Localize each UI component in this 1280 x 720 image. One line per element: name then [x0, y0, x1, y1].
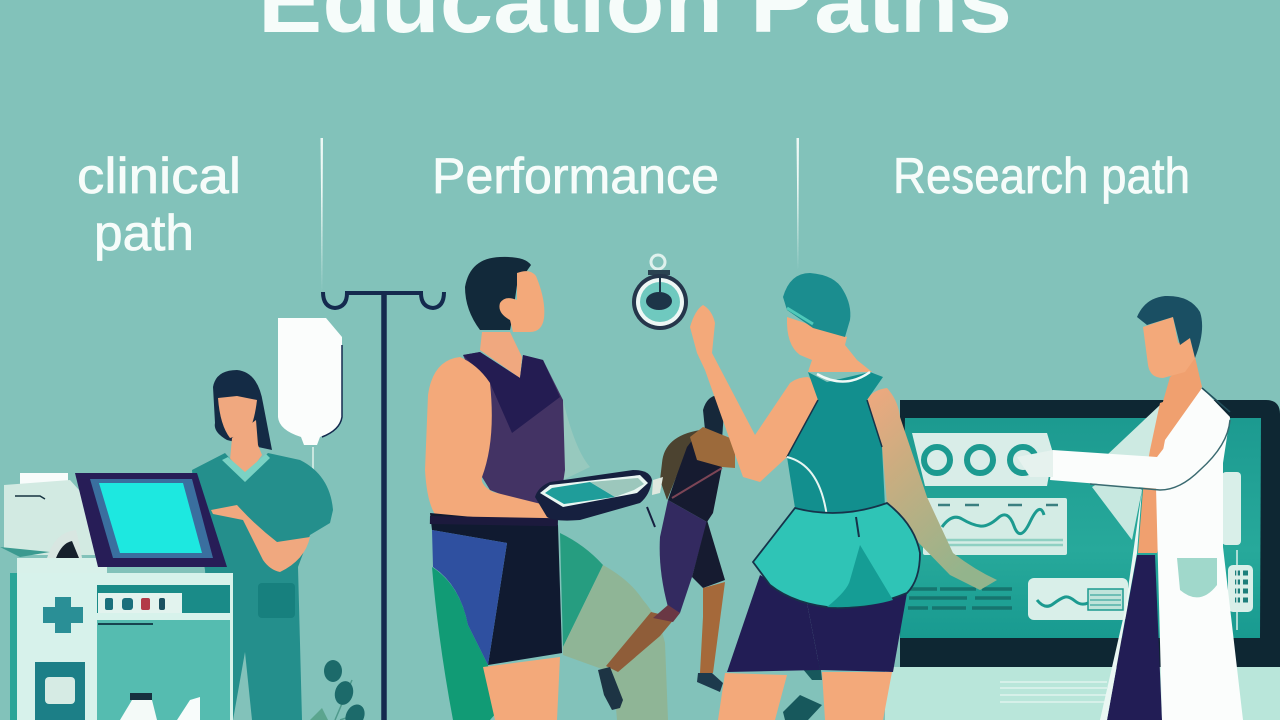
left arm: [690, 305, 818, 482]
heading: clinical path: clinical: [77, 148, 241, 204]
white device on cart: [0, 473, 95, 558]
indicator buttons: [105, 598, 165, 610]
right arm: [867, 388, 997, 590]
nurse face: [218, 396, 257, 438]
panel: status rings: [912, 433, 1053, 486]
monitor on cart: [75, 473, 227, 567]
panel: signal readout: [1028, 578, 1128, 620]
illustration: medical machine: [0, 473, 233, 720]
skirt: [753, 503, 920, 608]
athlete shorts: [430, 513, 562, 665]
icon: tablet: [535, 470, 663, 527]
trousers: [1107, 555, 1162, 720]
hand: [1017, 450, 1053, 477]
illustration: plant: [310, 660, 368, 720]
nurse arm: [211, 505, 310, 572]
athlete tank top: [463, 352, 565, 517]
illustration: background runner: [598, 395, 735, 710]
neck: [1157, 357, 1202, 427]
heading: clinical path: path: [94, 205, 194, 261]
heading: clinical path: [77, 148, 241, 261]
illustration: nurse: [192, 370, 333, 720]
legs: [718, 672, 892, 720]
coat: [1156, 388, 1243, 720]
shorts: [727, 575, 907, 672]
heading: research path: Research path: [893, 148, 1190, 204]
tank top: [787, 372, 885, 517]
illustration: researcher in white coat: [1017, 296, 1243, 720]
nurse pocket: [258, 583, 295, 618]
athlete head: [465, 257, 544, 378]
icon: stopwatch: [632, 255, 688, 330]
runner head: [703, 395, 725, 440]
head and cap: [783, 273, 872, 372]
illustration: research monitor: [885, 400, 1280, 720]
heading: performance: Performance: [432, 148, 719, 204]
illustration: IV stand and bag: [278, 292, 444, 720]
coat sleeve: [1050, 405, 1230, 490]
athlete arm: [425, 357, 552, 523]
illustration: athlete in teal: [690, 273, 997, 720]
doctor face: [1143, 317, 1195, 378]
illustration: floor objects under teal athlete: [783, 660, 822, 720]
illustration: athlete in purple: [425, 257, 565, 720]
pocket: [1177, 558, 1217, 597]
icon: medical cross: [43, 597, 83, 633]
illustration: backdrop shapes: [560, 400, 668, 720]
doctor hair: [1137, 296, 1202, 358]
bare chest: [1138, 388, 1202, 553]
panel: waveform chart: [923, 498, 1067, 555]
